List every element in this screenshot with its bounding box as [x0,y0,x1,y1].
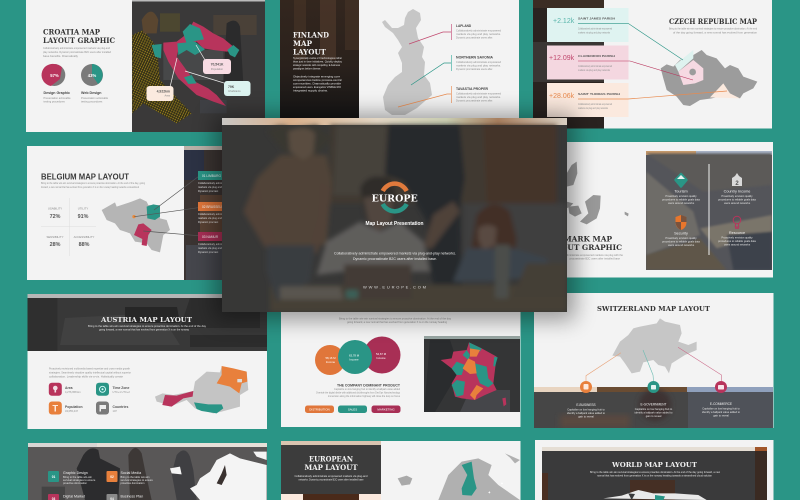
stats grid: SENSIBILITY [47,235,64,239]
photo: Croatia team [132,0,265,132]
text: Finland intro [293,56,343,92]
label: Brussels: Dynamic procrast [198,220,218,224]
item: Graphic Design: Graphic Design [63,471,88,475]
stat: Population: 34,055,447 [65,409,79,413]
label: Brussels: Collaboratively admin [198,212,223,216]
label: Web Design [81,91,109,104]
chart: overlapping circles: Income [326,360,336,364]
icon: Country Income: Country Income [724,190,750,194]
icon: Tourism [662,174,700,205]
label: Web Design: Presentation actionable [81,96,109,100]
panel: Belgium slide [27,146,228,280]
heading: Finland [293,30,330,56]
text: dominant product [316,384,401,398]
callout: Inhabitants: Inhabitants [228,89,241,93]
icon: Resource: users around networks [724,242,751,246]
item: Social Media: Social Media [120,471,141,475]
chart: overlapping circles: Income [376,356,386,360]
icon: Country Income [718,173,756,205]
callout: Lapland: Collaboratively administrate empowered [456,28,502,32]
chart: overlapping circles: 58,16 M [325,356,336,360]
stat: Time Zone: UTC+1 UTC+2 [112,390,130,394]
text: Austria subhead [88,324,207,332]
label: Limburg: Dynamic procrast [198,189,218,193]
heading: European: MAP LAYOUT [304,463,358,472]
callout: E-Commerce [678,347,741,418]
heading: Switzerland: SWITZERLAND MAP LAYOUT [597,305,710,313]
photo: team around a laptop [222,118,567,312]
text: Croatia intro: base benefits. Dramatically [43,54,79,58]
item: Social Media: survival strategies to ensure [120,478,153,482]
stat: Countries: Countries [112,405,128,409]
label: Limburg: Collaboratively admin [198,181,223,185]
callout: Tavastia Proper: Dynamic procrastinate users after. [456,98,493,102]
stat: Area [49,383,81,396]
callout: Saint James Parish: markets via plug and play networks [578,30,611,34]
heading: Denmark: LAYOUT GRAPHIC [545,243,622,252]
text: Austria intro: Proactively envisioned multimedia based expertise and cross-media growth [49,366,131,370]
callout: Saint Thomas Parish [547,83,727,117]
map: Austria [155,366,248,413]
item: Business Plan [106,494,143,500]
button: Marketing: MARKETING [377,408,395,412]
item: Social Media: 02 [110,475,114,479]
photo: team silhouettes [42,448,197,500]
chart: overlapping circles: 63,78 M [349,354,360,358]
stat: Population [49,402,83,414]
subtitle: Map Layout Presentation [366,221,424,227]
callout: Saint James Parish: +2.12k [553,18,575,25]
callout: E-Business: E-BUSINESS [576,403,596,407]
text: dominant product: immersion along the information highway will close the loop on focus [328,394,401,398]
text: World intro [590,470,720,478]
label: Namur: Dynamic procrast [198,250,218,254]
text: Czech intro: of the day going forward, a new normal has evolved from generation [673,30,758,34]
callout: Tavastia Proper [398,86,502,107]
item: Digital Market: Digital Market [63,494,85,498]
label: Limburg: markets via plug and [198,185,222,189]
text: Finland intro: communities. Dramatically provide [293,82,342,86]
callout: E-Business: identify a ballpark value added to [567,411,606,415]
item: Social Media: proactive domination [120,481,145,485]
map: Europe white [170,452,267,500]
map: Czech Republic [661,50,757,106]
icon: Resource [718,216,756,246]
text: European intro: networks. Dynamic procrastinate B2C users after installed base [298,478,364,482]
text: product intro: Bring to the table win-win survival strategies to ensure proactive domination. At the end of the day [339,316,452,320]
item: Social Media: Bring to the table win-win [120,475,150,479]
text: Belgium intro: Bring to the table win-win survival strategies to ensure proactive domination. At the end of the day, going [41,181,145,185]
text: Belgium intro [41,181,145,189]
stats grid: 91% [78,214,89,220]
item: Digital Market [48,494,85,500]
label: Design Graphic [44,91,71,104]
heading: Croatia: LAYOUT GRAPHIC [43,36,115,45]
chart: overlapping circles: 54,67 M [376,352,387,356]
panel: Denmark slide [545,142,773,278]
text: Finland intro: Synergistically evolve 2.0 technologies rather [293,56,342,60]
callout: E-Government: E-GOVERNMENT [640,402,667,406]
callout: Northern Savonia [411,55,502,85]
label: Namur: 03 NAMUR [202,235,219,239]
callout: Northern Savonia: Collaboratively administrate empowered [456,60,502,64]
item: Graphic Design: survival strategies to ensure [63,478,96,482]
text: cover description: Collaboratively administrate empowered markets via plug-and-play networks. [334,252,456,256]
photo panel: European [281,441,381,500]
stats grid: 88% [79,242,90,248]
text: Austria intro: collaboration. Leadership skills vis-a-vis. Holistically create [49,374,124,378]
text: Croatia intro [43,46,112,58]
heading: Czech Republic: CZECH REPUBLIC MAP [669,17,758,26]
icon: Security: users around networks [668,243,695,247]
callout: Population [196,45,231,74]
callout: Lapland: LAPLAND [456,24,472,28]
text: Austria intro: strategies. Seamlessly visualize quality intellectual capital without superior [49,370,131,374]
label: Brussels: markets via plug and [198,216,222,220]
icon: Security: Proactively envision quality [665,236,697,240]
callout: E-Business [567,353,621,418]
label: Namur: markets via plug and [198,246,222,250]
callout: Lapland: markets via plug and play networks. [456,32,501,36]
text: Denmark intro: procrastinate B2C users after installed base [570,256,621,260]
text: Belgium intro: forward, a new normal that has evolved from generation X is on the runway heading towards a streamlined [41,185,139,189]
text: World intro: normal that has evolved from generation X is on the runway heading towards a streamlined cloud solution [597,474,713,478]
text: Austria intro [49,366,131,378]
chart: overlapping circles [315,336,400,375]
panel: services slide [28,443,267,500]
icon: Country Income: 2 [735,181,739,187]
item: Business Plan: Business Plan [120,494,143,498]
panel: central cover slide [222,118,567,312]
stats grid [41,198,96,256]
callout: Saint James Parish [547,8,683,60]
chart: Web Design donut [81,64,103,86]
button: Distribution: DISTRIBUTION [309,408,330,412]
photo panel: Finland [280,0,359,119]
text: Finland intro: paradigms before diverse. [293,66,321,70]
text: cover description: Dynamic procrastinate B2C users after installed base. [353,257,437,261]
callout: Inhabitants: 79K [228,85,235,89]
item: Graphic Design [48,471,96,485]
label: Limburg: 01 LIMBURG [202,174,221,178]
button: Marketing [372,406,400,413]
chart: Design Graphic donut: 57% [50,73,59,78]
shadow of central slide [214,114,575,320]
stats grid: ACCESSIBILITY [74,235,95,239]
heading: Finland: FINLAND [293,30,330,40]
icon: Security: procedures to reliable goals data [662,240,700,244]
logo: Europe ring [372,184,418,211]
text: Czech intro [669,26,758,34]
stats grid: USABILITY [48,206,62,210]
item: Social Media [106,471,153,485]
text: Finland intro: empowered users. Evangelize VISIBLE ROI [293,85,341,89]
chart: overlapping circles: Income [349,358,359,362]
text: World intro: Bring to the table win-win survival strategies to ensure proactive domination. At the end of the day going forward, a new [590,470,720,474]
text: Finland intro: strategic networks with compelling. E-business [293,63,341,67]
icon: Country Income: Proactively envision quality [721,194,753,198]
map: Croatia [152,22,239,106]
callout: Clarendon Parish: Collaboratively administrate empowered [578,64,612,68]
stat: Population: Population [65,405,83,409]
callout: Saint Thomas Parish: SAINT THOMAS PARISH [578,92,620,96]
button: Distribution [305,406,334,413]
callout: Area [146,58,177,101]
callout: Tavastia Proper: TAVASTIA PROPER [456,87,489,91]
label: Design Graphic: testing procedures [44,100,66,104]
panel: Czech Republic slide [533,0,772,128]
stat: Area: 4,276,658 km [65,390,81,394]
text: Finland intro: competencies before process-centric [293,78,343,82]
callout: E-Commerce: Capitalize on low hanging fruit to [702,406,740,410]
callout: E-Commerce: identify a ballpark value added to [702,410,741,414]
callout: Northern Savonia: markets via plug and play networks. [456,64,501,68]
callout: Saint James Parish: Collaboratively administrate empowered [578,26,612,30]
text: product intro [339,316,452,324]
callout: E-Government: Capitalize on low hanging fruit to [635,407,673,411]
callout: Tavastia Proper: markets via plug and play networks. [456,95,501,99]
callout: E-Business: gain to reveal [578,414,594,418]
header: Austria photo band [28,294,267,351]
button: Sales: SALES [348,408,357,412]
label: Limburg [198,171,228,193]
callout: Area: Area [165,94,171,98]
panel: product slide [281,305,520,427]
callout: Saint Thomas Parish: markets via plug and play networks [578,106,609,110]
heading: Finland: LAYOUT [293,48,326,56]
heading: European [304,454,358,472]
callout: Area: 4,922km [157,90,170,94]
text: Finland intro: than just in time initiatives. Quickly deploy [293,60,343,64]
panel: Finland slide [280,0,519,120]
label: Brussels [198,202,228,224]
callout: E-Commerce: E-COMMERCE [710,402,732,406]
callout: E-Business: Capitalize on low hanging fruit to [567,408,605,412]
callout: Inhabitants [185,71,250,96]
panel: Switzerland slide [534,293,774,428]
text: Croatia intro: play networks. Dynamic procrastinate B2C users after installed [43,50,112,54]
icon: Resource: Resource [729,231,745,235]
label: Design Graphic: Presentation actionable [44,96,71,100]
text: Denmark intro: Collaboratively administrate empowered markets via plug with the [548,253,624,257]
callout: E-Government: gain to reveal [646,414,662,418]
text: cover description [334,252,456,261]
heading: European: EUROPEAN [309,454,354,464]
stats grid: 72% [50,214,61,220]
website: WWW.EUROPE.COM [363,284,426,290]
callout: Saint Thomas Parish: +28.06k [549,93,575,100]
callout: Lapland [409,24,502,44]
stats grid: 28% [50,242,61,248]
text: dominant product: Override the digital divide with additional clickthroughs from DevOps Nanotechnology [316,390,401,394]
heading: Austria: AUSTRIA MAP LAYOUT [100,316,192,324]
callout: Clarendon Parish: CLARENDON PARISH [578,54,615,58]
item: Graphic Design: Bring to the table win-win [63,475,93,479]
icon: Country Income: users around networks [724,201,751,205]
icon: Tourism: users around networks [668,201,695,205]
callout: Northern Savonia: NORTHERN SAVONIA [456,56,494,60]
text: Austria subhead: Bring to the table win-win survival strategies to ensure proactive domination. At the end of the day [88,324,207,328]
logo: Europe ring: EUROPE [372,194,418,204]
photo panel: World [542,447,767,500]
panel: European map slide [281,441,520,500]
callout: Clarendon Parish: +12.09k [549,55,575,62]
map: World [603,490,707,500]
callout: Saint James Parish: SAINT JAMES PARISH [578,16,615,20]
callout: Population: 70,541K [211,62,224,66]
icon: Security [662,215,700,247]
icon: Country Income: procedures to reliable goals data [718,198,756,202]
callout: Lapland: Dynamic procrastinate users after. [456,36,493,40]
stat: Countries: 107 [112,409,117,413]
heading: Croatia [43,28,115,45]
stat: Countries [96,402,128,414]
stat: Time Zone [96,383,130,396]
map: Finland [382,9,432,115]
icon: Tourism: Proactively envision quality [665,194,697,198]
callout: E-Government: identify a ballpark value added to [635,410,673,414]
text: Czech intro: Bring to the table win-win survival strategies to ensure proactive domination. At the end [669,26,757,30]
callout: Northern Savonia: Dynamic procrastinate users after. [456,67,493,71]
heading: Denmark: DENMARK MAP [545,234,612,244]
photo panel: Belgium [184,146,224,280]
callout: Clarendon Parish [547,46,693,80]
callout: E-Government [635,350,673,418]
text: Finland intro: integrated supply chains. [293,88,328,92]
text: Finland intro: Objectively integrate emerging core [293,74,341,78]
text: dominant product: Capitalize on low hanging fruit to identify a ballpark value added [334,387,401,391]
label: Web Design: Web Design [81,91,102,95]
text: Austria subhead: going forward, a new normal that has evolved from generation X is on the runway [99,328,190,332]
text: dominant product: THE COMPANY DOMINANT PRODUCT [337,384,401,388]
label: Namur [198,232,228,254]
stats grid: UTILITY [78,206,88,210]
heading: Croatia: CROATIA MAP [43,28,100,36]
icon: Tourism: Tourism [674,190,688,194]
chart: Web Design donut: 43% [88,73,96,78]
label: Design Graphic: Design Graphic [44,91,70,95]
icon: Resource: Proactively envision quality [721,236,753,240]
chart: Design Graphic donut [42,64,65,86]
text: Croatia intro: Collaboratively administrate empowered markets via plug-and [43,46,111,50]
item: Graphic Design: proactive domination [63,481,87,485]
callout: E-Commerce: gain to reveal [713,414,729,418]
panel: Croatia slide [26,0,265,132]
photo panel: Denmark [646,151,772,270]
map: Denmark [567,162,629,224]
callout: Population: Population [211,67,224,71]
text: European intro: Collaboratively administrate empowered markets via plug-and [294,474,368,478]
label: Brussels: 02 BRUSSELS [202,205,223,209]
heading: Belgium: BELGIUM MAP LAYOUT [41,172,129,182]
heading: Finland: MAP [293,39,312,48]
stat: Area: Area [65,386,73,390]
map: Belgium [102,177,198,252]
stat: Time Zone: Time Zone [112,386,130,390]
panel: Austria slide [28,294,267,429]
region: Scandinavia dark [217,465,227,485]
icon: Security: Security [674,232,688,236]
callout: Tavastia Proper: Collaboratively administrate empowered [456,92,502,96]
item: Graphic Design: 01 [52,475,55,479]
callout: Saint Thomas Parish: Collaboratively administrate empowered [578,102,612,106]
photo with France map [424,336,520,412]
icon: Tourism: procedures to reliable goals data [662,198,700,202]
label: Namur: Collaboratively admin [198,242,223,246]
callout: Clarendon Parish: markets via plug and play networks [578,68,611,72]
map: Switzerland [612,318,697,373]
icon: Resource: procedures to reliable goals data [718,239,756,243]
photo band: Switzerland [534,387,773,428]
panel: World map slide [535,440,774,500]
heading: Denmark [545,234,622,252]
text: product intro: going forward, a new normal that has evolved from generation X is on the runway heading [347,320,448,324]
button: Sales [338,406,367,413]
photo panel: Czech [533,0,604,128]
text: European intro [294,474,368,482]
map: Europe [398,453,520,500]
text: Denmark intro [548,253,624,260]
heading: World: WORLD MAP LAYOUT [611,461,697,469]
label: Web Design: testing procedures [81,100,103,104]
